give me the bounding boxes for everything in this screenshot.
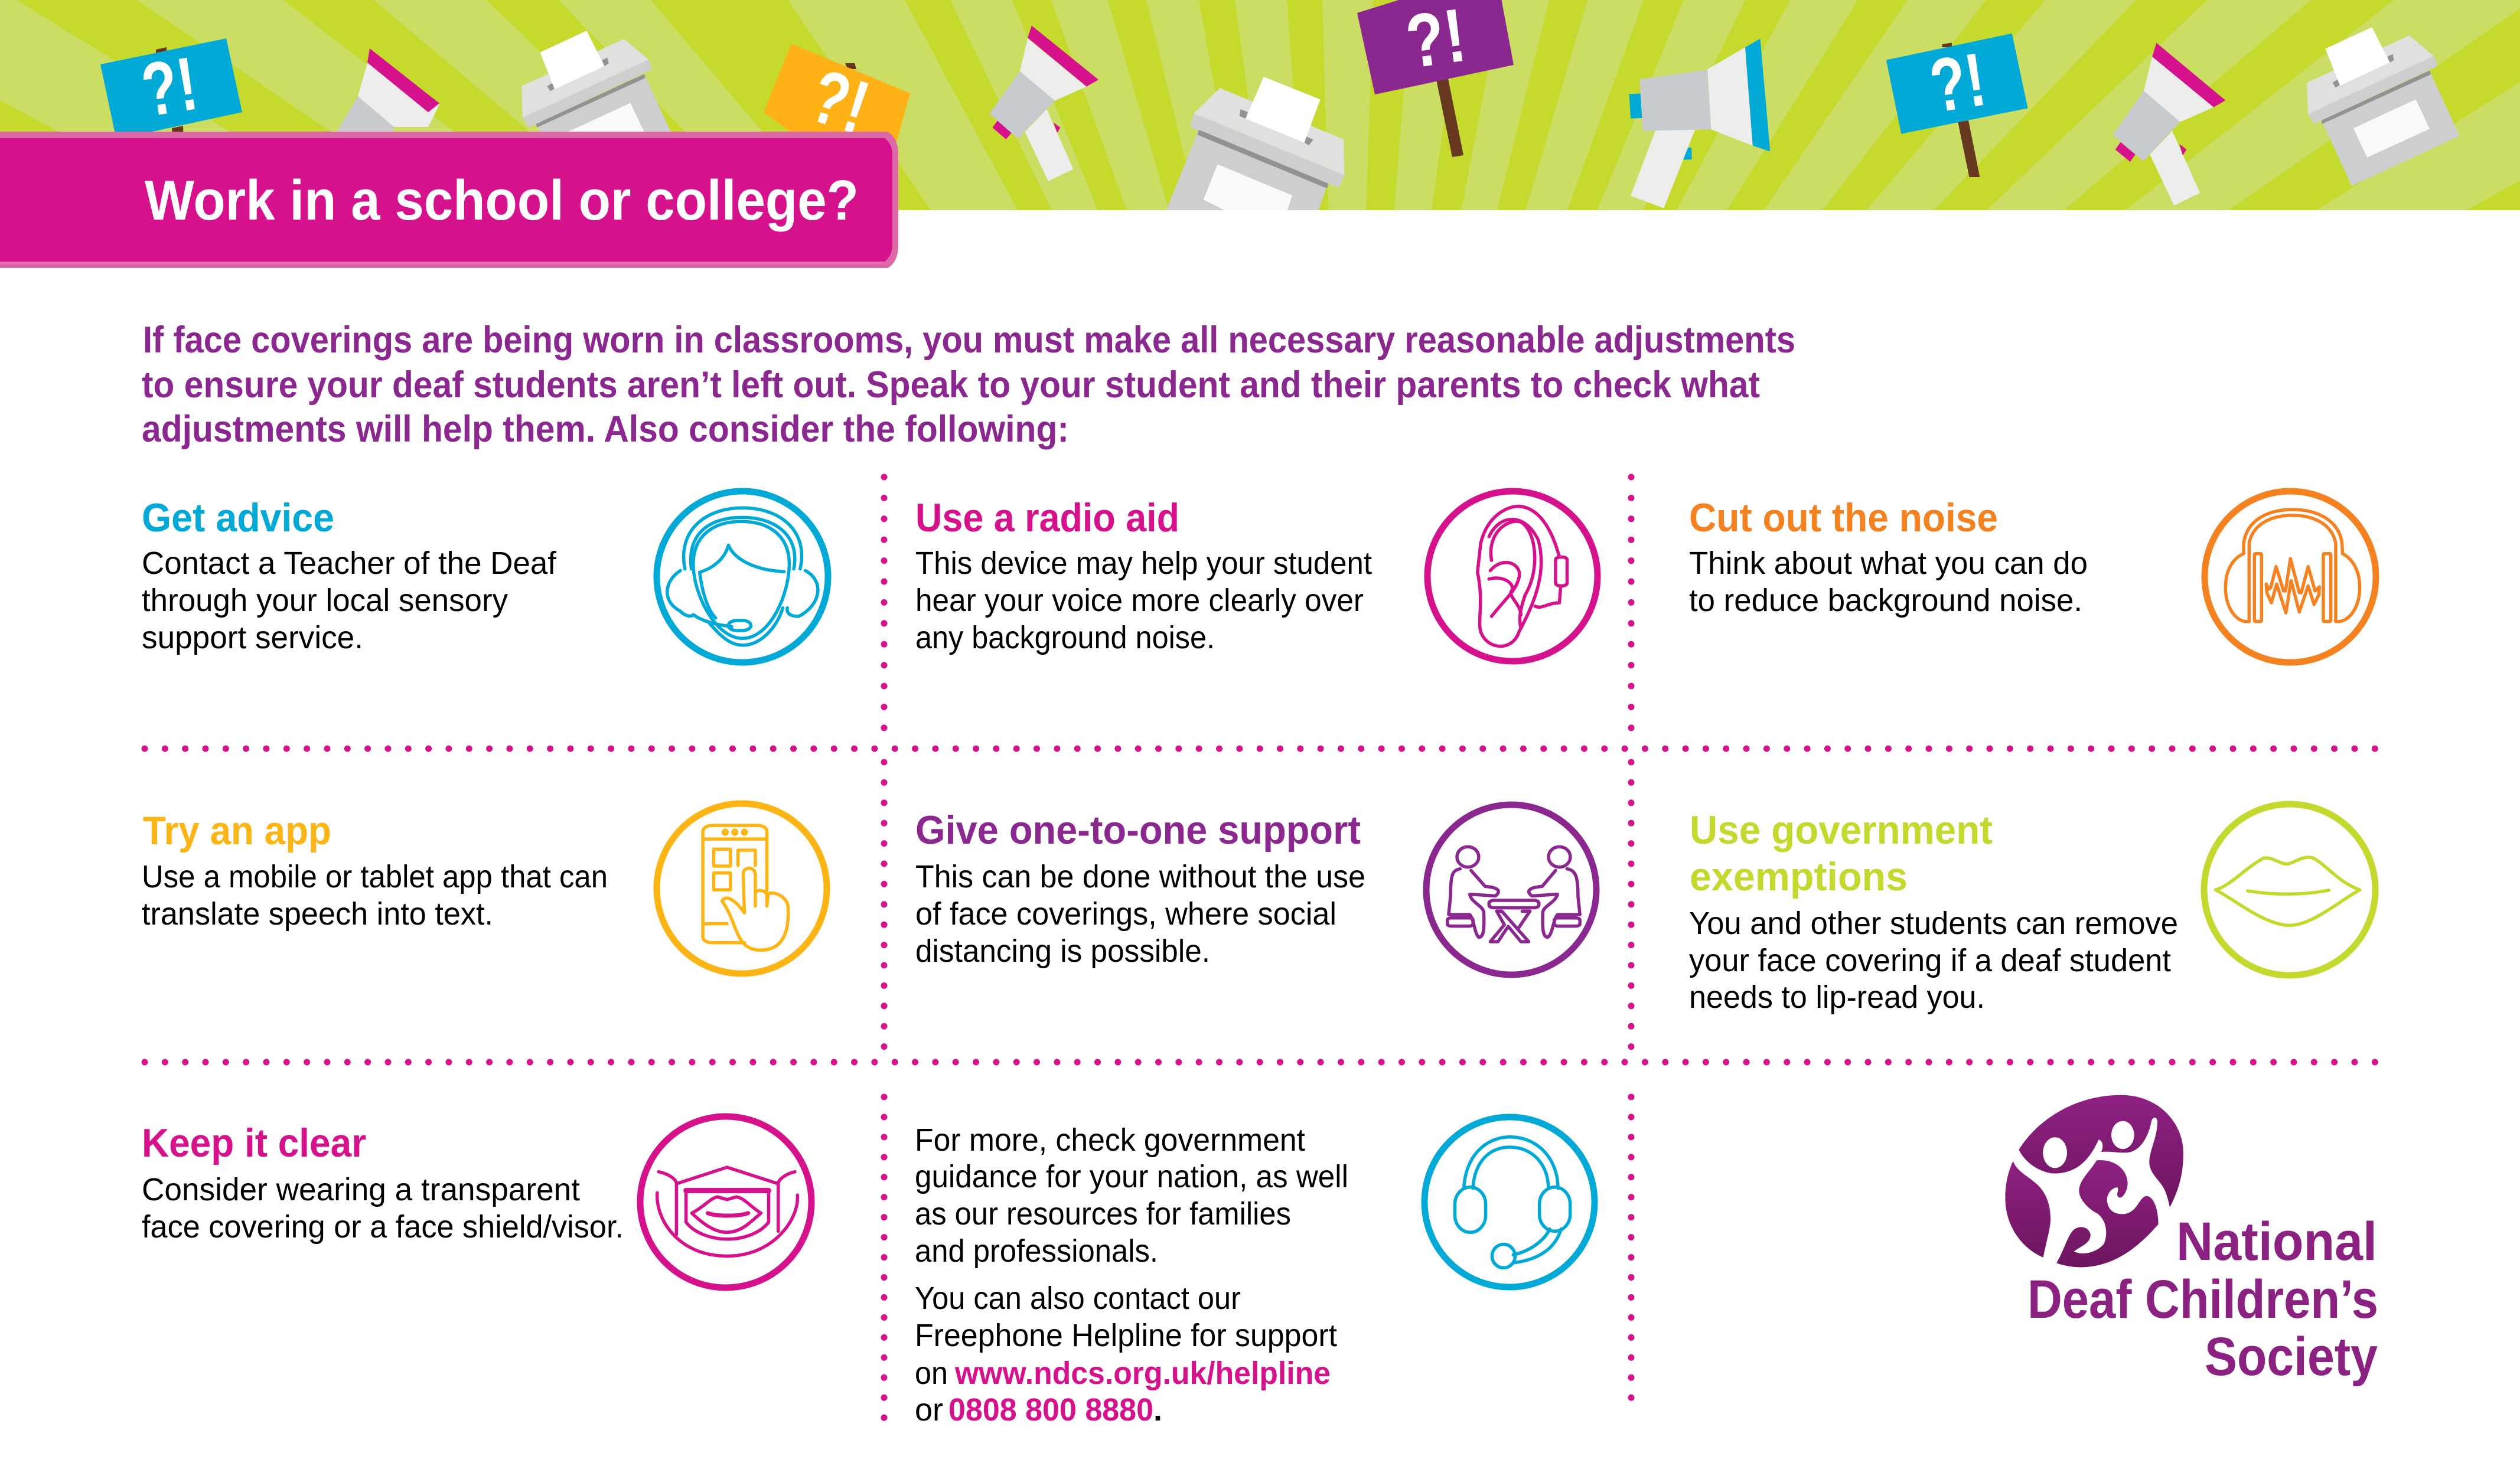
panel: try an app xyxy=(142,804,827,974)
intro paragraph xyxy=(142,319,1795,450)
icon: orange protest sign: ?! xyxy=(801,53,879,151)
text: more guidance: guidance for your nation, as well xyxy=(915,1159,1348,1194)
text: logo wordmark xyxy=(2027,1212,2378,1387)
icon: logo emblem xyxy=(2005,1095,2183,1267)
panel: keep it clear xyxy=(142,1116,811,1288)
panel: get advice xyxy=(142,491,828,662)
text: more guidance xyxy=(915,1122,1348,1269)
text: keep it clear body xyxy=(142,1172,624,1245)
heading: keep it clear: Keep it clear xyxy=(142,1121,366,1165)
heading: use a radio aid: Use a radio aid xyxy=(915,495,1179,540)
intro paragraph: to ensure your deaf students aren’t left out. Speak to your student and their parents to check what xyxy=(142,364,1760,406)
heading: give one-to-one support: Give one-to-one support xyxy=(915,808,1361,853)
icon: purple protest sign xyxy=(1357,0,1514,157)
panel: cut out the noise xyxy=(1689,491,2376,662)
text: helpline contact: Freephone Helpline for support xyxy=(915,1318,1337,1353)
icon: headphones with sound wave xyxy=(2205,491,2376,662)
title banner: Work in a school or college? xyxy=(145,169,859,232)
text: keep it clear body: face covering or a face shield/visor. xyxy=(142,1209,624,1245)
text: helpline contact: You can also contact our xyxy=(915,1281,1241,1316)
text: radio aid body: any background noise. xyxy=(915,620,1215,655)
text: exemptions body: needs to lip-read you. xyxy=(1689,979,1985,1015)
text: exemptions body: your face covering if a deaf student xyxy=(1689,943,2171,978)
text: get advice body: support service. xyxy=(142,620,363,655)
intro paragraph: If face coverings are being worn in classrooms, you must make all necessary reasonable adjustments xyxy=(143,319,1795,361)
text: helpline contact: www.ndcs.org.uk/helpline xyxy=(954,1356,1331,1391)
text: more guidance: as our resources for families xyxy=(915,1196,1291,1232)
icon: megaphone upper middle xyxy=(989,25,1098,181)
text: one-to-one body: of face coverings, where social xyxy=(915,896,1336,932)
panel: give one-to-one support xyxy=(915,805,1596,975)
heading: use government exemptions: exemptions xyxy=(1690,854,1908,899)
icon: ballot box left xyxy=(521,31,671,132)
text: keep it clear body: Consider wearing a transparent xyxy=(142,1172,580,1207)
icon: two people at a table xyxy=(1426,805,1596,975)
text: exemptions body xyxy=(1689,906,2178,1015)
text: radio aid body: hear your voice more clearly over xyxy=(915,583,1364,618)
icon: megaphone with pink rim xyxy=(337,48,439,132)
text: more guidance: and professionals. xyxy=(915,1233,1158,1269)
heading: use government exemptions xyxy=(1690,808,1993,899)
icon: megaphone with blue rim xyxy=(1629,39,1770,208)
icon: ballot box right xyxy=(2307,27,2460,186)
icon: transparent face mask xyxy=(640,1116,811,1288)
text: app body xyxy=(142,859,608,932)
panel: use government exemptions xyxy=(1689,804,2375,1015)
text: logo wordmark: Society xyxy=(2205,1327,2378,1387)
icon: helpline headset xyxy=(1424,1117,1595,1287)
icon: megaphone right xyxy=(2113,43,2225,205)
icon: blue protest sign xyxy=(100,38,242,142)
text: noise body: to reduce background noise. xyxy=(1689,583,2082,618)
icon: blue protest sign: ?! xyxy=(136,41,203,133)
text: radio aid body xyxy=(915,546,1372,655)
heading: get advice: Get advice xyxy=(142,495,334,540)
text: get advice body xyxy=(142,546,557,655)
text: app body: Use a mobile or tablet app that can xyxy=(142,859,608,894)
icon: ballot box centre xyxy=(1166,77,1344,211)
text: helpline contact: or xyxy=(915,1392,943,1428)
icon: headset woman xyxy=(657,491,828,662)
text: noise body xyxy=(1689,546,2088,618)
icon: blue protest sign right xyxy=(1886,34,2028,177)
text: one-to-one body: distancing is possible. xyxy=(915,933,1210,969)
panel: helpline xyxy=(915,1117,1595,1428)
text: more guidance: For more, check government xyxy=(915,1122,1305,1158)
intro paragraph: adjustments will help them. Also consider the following: xyxy=(142,409,1069,450)
heading: try an app: Try an app xyxy=(143,808,331,853)
text: helpline contact xyxy=(915,1281,1337,1428)
banner: green sunburst with protest illustrations xyxy=(0,0,2520,210)
text: app body: translate speech into text. xyxy=(142,896,493,932)
logo: National Deaf Children's Society xyxy=(2005,1095,2378,1387)
title banner xyxy=(0,132,898,268)
icon: ear with hearing aid xyxy=(1427,491,1598,661)
text: radio aid body: This device may help your student xyxy=(915,546,1372,581)
icon: phone and pointing hand xyxy=(657,804,827,974)
text: get advice body: through your local sensory xyxy=(142,583,508,618)
text: logo wordmark: Deaf Children’s xyxy=(2027,1269,2378,1330)
text: one-to-one body xyxy=(915,859,1365,969)
icon: orange protest sign xyxy=(764,44,910,151)
text: get advice body: Contact a Teacher of the Deaf xyxy=(142,546,557,581)
text: one-to-one body: This can be done without the use xyxy=(915,859,1365,894)
heading: use government exemptions: Use government xyxy=(1690,808,1993,853)
text: sign symbols: ?! xyxy=(1924,37,1991,129)
text: helpline contact: on xyxy=(915,1356,948,1391)
heading: cut out the noise: Cut out the noise xyxy=(1689,495,1998,540)
icon: lips xyxy=(2204,804,2375,975)
text: noise body: Think about what you can do xyxy=(1689,546,2088,581)
text: exemptions body: You and other students can remove xyxy=(1689,906,2178,941)
text: logo wordmark: National xyxy=(2176,1212,2377,1272)
text: helpline contact: . xyxy=(1153,1392,1162,1428)
text: helpline contact: 0808 800 8880 xyxy=(948,1392,1153,1428)
panel: use a radio aid xyxy=(915,491,1598,661)
